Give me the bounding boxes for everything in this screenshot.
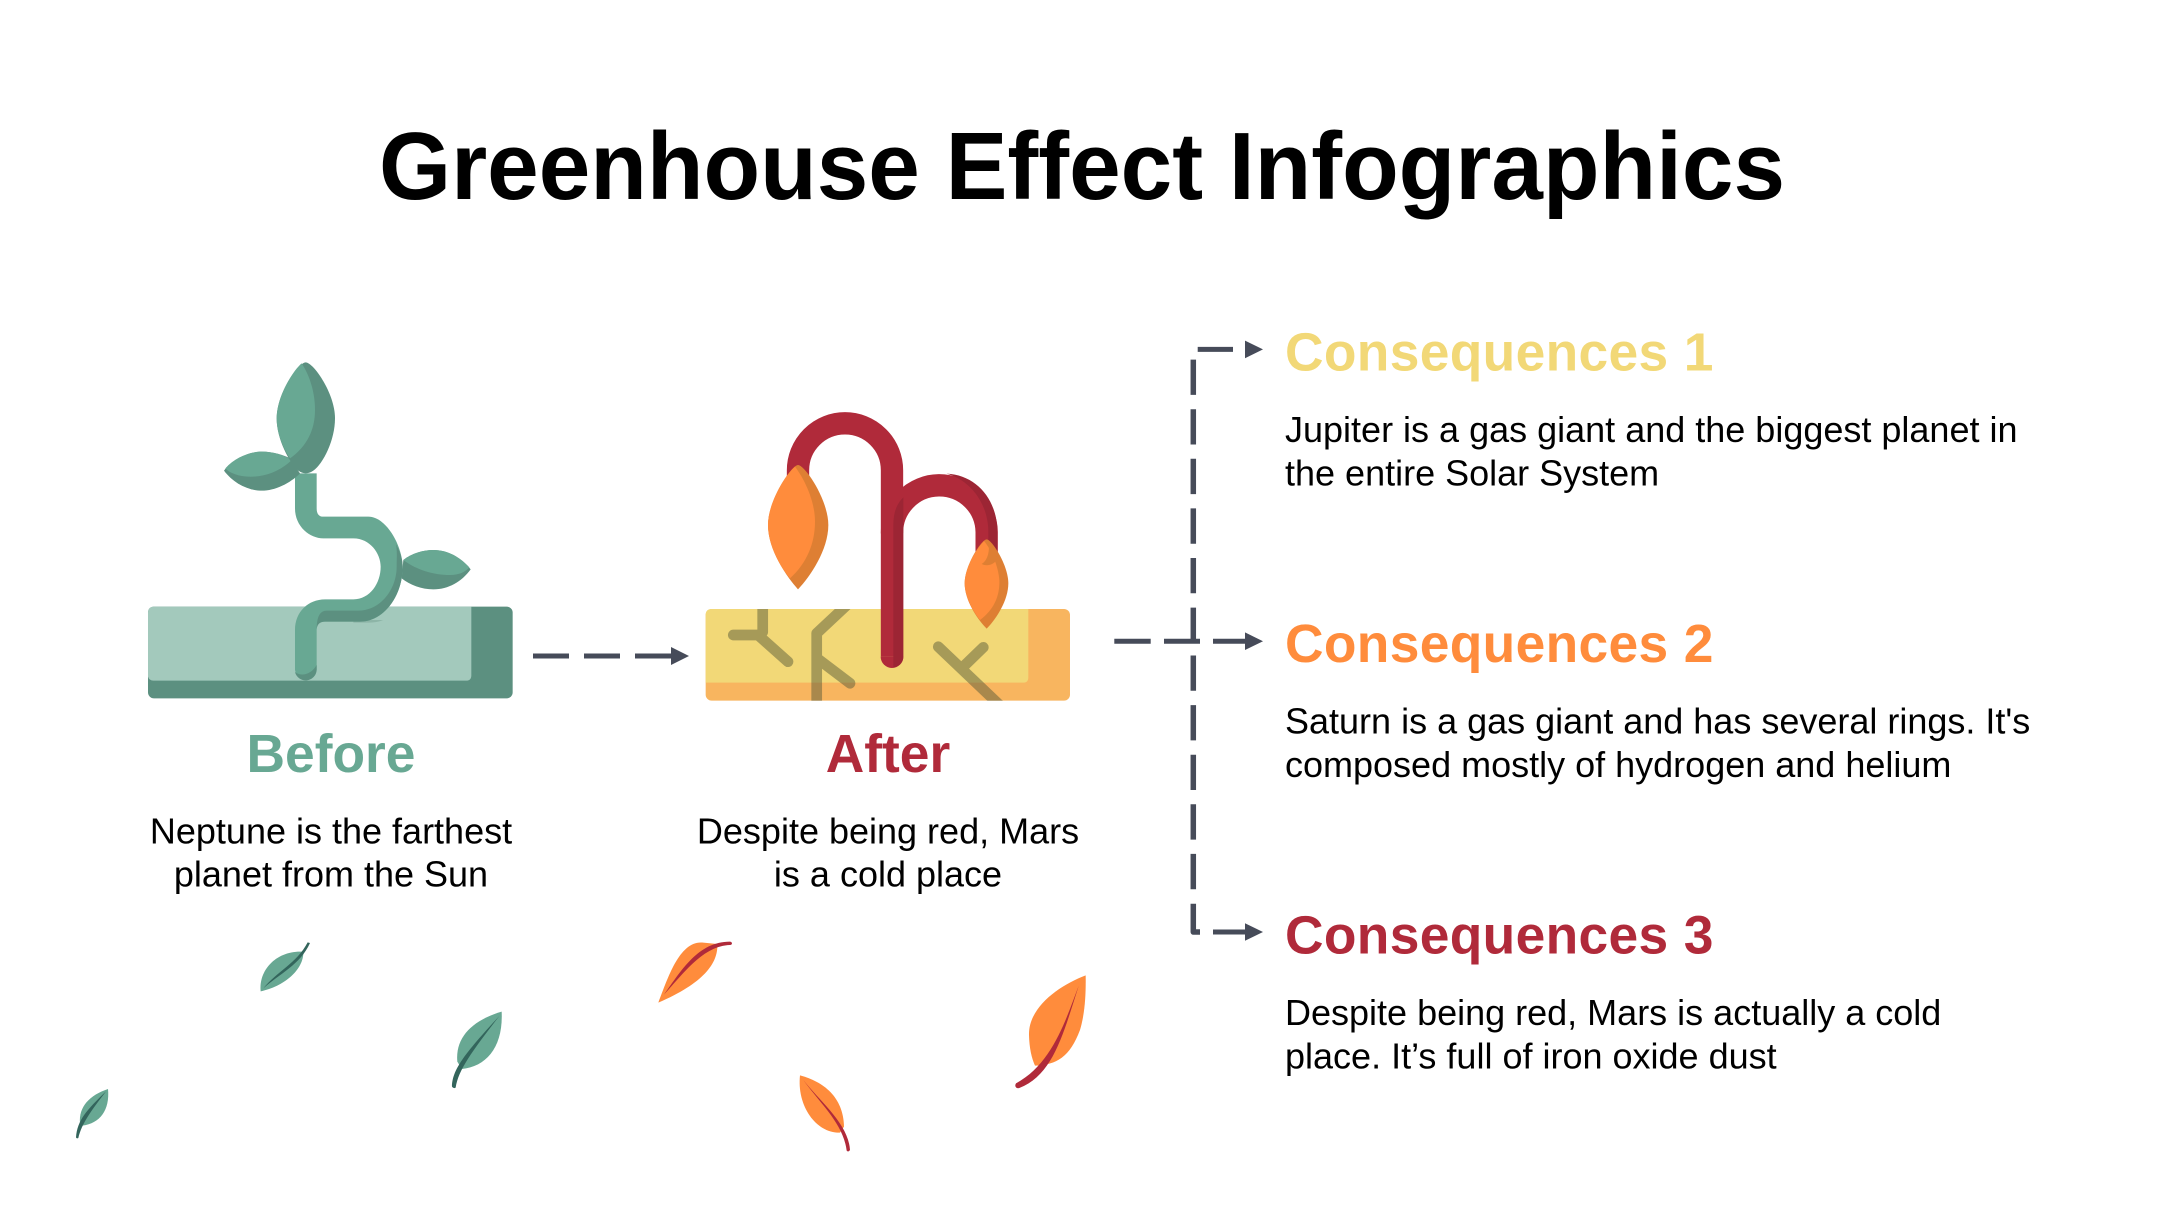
dry soil block [706, 609, 1070, 701]
text: before description: planet from the Sun [174, 854, 488, 894]
text: consequences 2 description: Saturn is a gas giant and has several rings. It's [1285, 700, 2030, 741]
text: after description: Despite being red, Mars [697, 810, 1079, 852]
stem [295, 473, 403, 680]
icon: falling green leaf, bottom left [76, 1089, 108, 1138]
soil block [148, 607, 513, 698]
title: Greenhouse Effect Infographics [379, 113, 1785, 220]
vertical dashed connector [1193, 360, 1200, 932]
icon: falling orange leaf, top left [658, 942, 732, 1003]
text: consequences 1 description: the entire Solar System [1285, 452, 1659, 493]
arrow: consequences 3 [1213, 923, 1263, 941]
heading: consequences 1: Consequences 1 [1285, 324, 1714, 383]
icon: falling green leaf, top [260, 942, 310, 991]
heading: consequences 2: Consequences 2 [1285, 615, 1714, 674]
right wilted leaf [965, 539, 1008, 629]
icon: falling orange leaf, right [1015, 975, 1086, 1088]
arrow: consequences 1 [1198, 341, 1263, 358]
text: consequences 3 description: Despite being red, Mars is actually a cold [1285, 992, 1941, 1033]
heading: after: After [826, 725, 950, 784]
arrows: after to consequences [1114, 341, 1263, 941]
icon: healthy sprout in soil [148, 362, 513, 698]
soil cracks [728, 609, 1003, 701]
icon: falling green leaf, right [452, 1012, 502, 1088]
icon: falling orange leaf, bottom [800, 1075, 850, 1152]
heading: before: Before [247, 725, 415, 784]
heading: consequences 3: Consequences 3 [1285, 907, 1714, 966]
left wilted leaf [768, 465, 828, 589]
text: after description: is a cold place [774, 854, 1002, 894]
arrow: before to after [533, 647, 689, 665]
arrow: consequences 2 [1114, 632, 1263, 650]
icon: wilted plant in cracked soil [706, 423, 1070, 715]
text: before description: Neptune is the farthest [150, 810, 512, 852]
drooping stems [798, 423, 997, 668]
right leaf [402, 550, 471, 589]
text: consequences 1 description: Jupiter is a gas giant and the biggest planet in [1285, 409, 2018, 450]
left leaf [224, 452, 300, 491]
text: consequences 2 description: composed mostly of hydrogen and helium [1285, 744, 1951, 785]
text: consequences 3 description: place. It’s full of iron oxide dust [1285, 1035, 1777, 1076]
top leaf [277, 362, 335, 473]
